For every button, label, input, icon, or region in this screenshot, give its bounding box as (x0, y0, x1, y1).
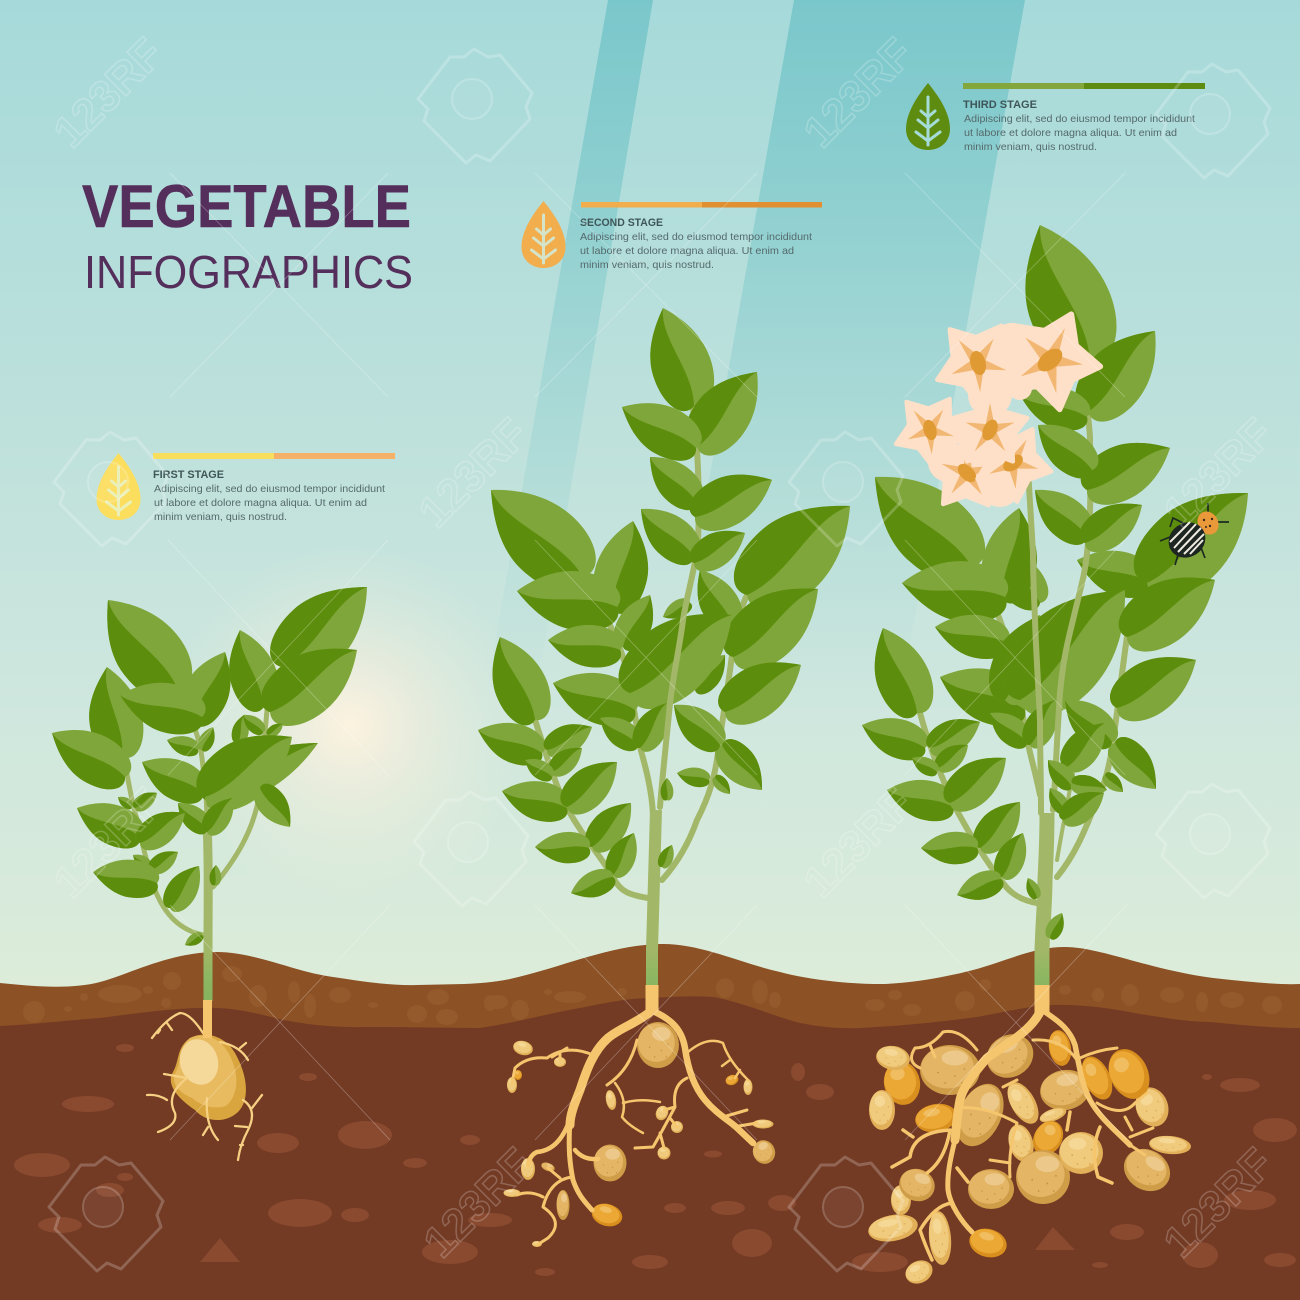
watermark: 123RF (44, 779, 172, 907)
third stage text: Adipiscing elit, sed do eiusmod tempor incididunt (964, 114, 1195, 125)
first stage text (153, 469, 385, 523)
second stage text: SECOND STAGE (580, 217, 663, 229)
plant 3 back leaves (849, 449, 1274, 754)
first stage text: minim veniam, quis nostrud. (154, 512, 287, 523)
second stage progress bar (581, 202, 822, 208)
plant 1 leaves (39, 562, 390, 950)
watermark: 123RF (409, 409, 537, 537)
second stage text: Adipiscing elit, sed do eiusmod tempor incididunt (580, 232, 812, 243)
plant 3 side stems (920, 587, 1140, 903)
sun glow (170, 545, 530, 905)
plant 2 side stems (535, 577, 747, 898)
stage info: second stage (522, 201, 822, 271)
watermark: 123RF (794, 29, 922, 157)
first stage text: FIRST STAGE (153, 469, 224, 481)
plant 2 front leaves (471, 299, 783, 905)
first stage text: ut labore et dolore magna aliqua. Ut enim ad (154, 498, 367, 509)
icon: third stage leaf drop (906, 83, 950, 150)
plant 2 back leaves (466, 463, 876, 757)
stage info: first stage (96, 453, 395, 523)
title: INFOGRAPHICS (84, 246, 413, 298)
third stage text (963, 99, 1195, 153)
icon: second stage leaf drop (522, 201, 566, 268)
watermark: 123RF (1154, 409, 1282, 537)
stage info: third stage (906, 83, 1205, 153)
third stage progress bar (963, 83, 1205, 89)
plant 3 front leaves (855, 210, 1210, 942)
third stage text: THIRD STAGE (963, 99, 1037, 111)
second stage text: minim veniam, quis nostrud. (580, 260, 714, 271)
plant: first stage (39, 562, 390, 1160)
watermark: 123RF (794, 779, 922, 907)
plant: third stage (849, 210, 1274, 1288)
title (82, 173, 413, 298)
plant 1 stems (123, 710, 267, 1001)
plant 3 tubers and roots (866, 985, 1192, 1288)
third stage text: ut labore et dolore magna aliqua. Ut enim ad (964, 128, 1177, 139)
plant 2 tubers and roots (504, 985, 779, 1247)
icon: colorado beetle (1160, 503, 1229, 565)
third stage text: minim veniam, quis nostrud. (964, 142, 1097, 153)
first stage text: Adipiscing elit, sed do eiusmod tempor incididunt (154, 484, 385, 495)
watermark: 123RF (1154, 1139, 1282, 1267)
title: VEGETABLE (82, 173, 411, 240)
light beams (485, 0, 1025, 700)
plant 3 flowers (879, 294, 1115, 519)
soil: upper layer (0, 944, 1300, 1300)
first stage progress bar (153, 453, 395, 459)
plant 1 tuber and roots (147, 1000, 262, 1160)
watermark: 123RF (44, 29, 172, 157)
plant 3 main stems (1027, 370, 1090, 1000)
second stage text: ut labore et dolore magna aliqua. Ut enim ad (580, 246, 794, 257)
plant 2 main stems (652, 407, 699, 1000)
second stage text (580, 217, 812, 271)
soil: lower layer with stones (0, 996, 1300, 1300)
icon: first stage leaf drop (96, 453, 140, 520)
plant: second stage (466, 299, 876, 1247)
watermark: 123RF (414, 1139, 542, 1267)
